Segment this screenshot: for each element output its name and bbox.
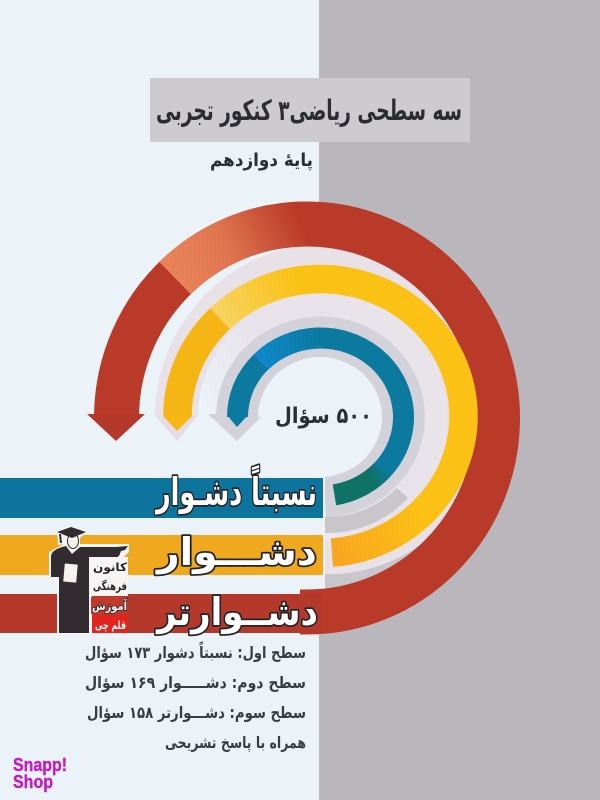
pale strip between disk and bars (315, 417, 325, 478)
logo: Farhangi: فرهنگی (93, 579, 127, 593)
logo: Snapp! Shop: Shop (13, 772, 53, 792)
logo: Kanoon: کانون (93, 560, 127, 575)
book (63, 564, 78, 583)
bar: difficult (0, 530, 323, 575)
with answers: همراه با پاسخ تشریحی (165, 733, 306, 753)
white halo (49, 525, 129, 634)
icon: graduate pointing with publisher logo (49, 525, 129, 634)
level one: سطح اول: نسبتاً دشوار ۱۷۳ سؤال (85, 640, 306, 662)
head (68, 534, 78, 548)
logo: Snapp! Shop (13, 755, 67, 792)
bar label: relatively difficult: نسبتاً دشـوار (155, 465, 317, 514)
concentric arc arrows chart (87, 224, 503, 612)
subtitle: پایهٔ دوازدهم (210, 150, 313, 171)
gown (51, 546, 118, 633)
logo: Snapp! Shop: Snapp! (13, 755, 67, 775)
title text: سه سطحی ریاضی۳ کنکور تجربی (156, 94, 462, 127)
text block: level details (85, 640, 306, 753)
bar label: difficult: دشـــوار (155, 530, 317, 574)
pointing hand (116, 546, 128, 556)
level three: سطح سوم: دشـــوارتر ۱۵۸ سؤال (87, 703, 306, 722)
grey halo around blue arc (238, 338, 404, 496)
red arc with arrow (87, 224, 497, 612)
inner disk (258, 357, 382, 477)
grey lower band of blue level (325, 488, 408, 533)
title box (150, 78, 470, 142)
logo: Amoozesh: آموزش (92, 599, 128, 614)
yellow arc with arrow (163, 279, 463, 553)
bar: more difficult (0, 590, 322, 634)
pale strip beside bars (319, 478, 325, 594)
pink halo band behind the yellow arc (155, 243, 503, 591)
bar label: more difficult: دشــوارتر (155, 590, 318, 634)
grey lower band of yellow level (325, 530, 450, 591)
background: grey right panel (319, 0, 600, 800)
background: light left panel (0, 0, 320, 800)
bar: relatively difficult (0, 465, 323, 518)
logo: Ghalamchi: قلم چی (95, 618, 126, 632)
pale inner band (198, 293, 447, 541)
level two: سطح دوم: دشـــــوار ۱۶۹ سؤال (85, 673, 306, 692)
blue arc with arrow (227, 338, 404, 495)
cap (57, 527, 86, 543)
500 questions label: ۵۰۰ سؤال (275, 404, 372, 429)
